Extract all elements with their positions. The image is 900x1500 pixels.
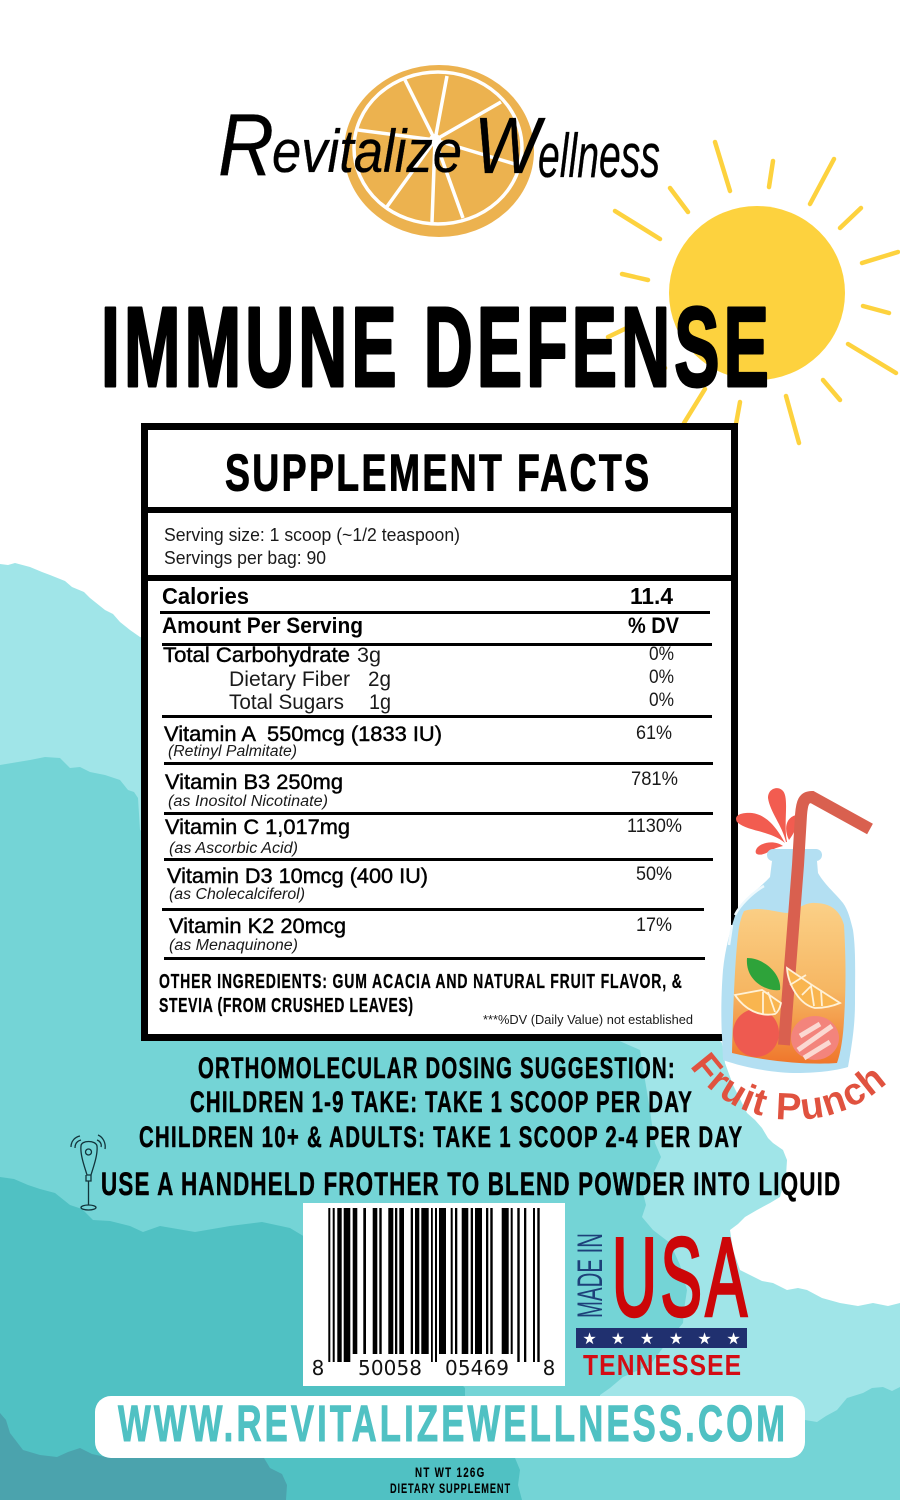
panel: supplement facts [144,426,734,1038]
orange slices [735,968,840,1015]
vitamin K2 row [164,915,705,960]
star band: ★ [640,1329,654,1348]
vitamin A row [164,723,713,765]
carbohydrate rows: Dietary Fiber [229,668,350,691]
other ingredients: OTHER INGREDIENTS: GUM ACACIA AND NATURAL FRUIT FLAVOR, & [159,969,682,993]
heading: supplement facts: SUPPLEMENT FACTS [225,443,649,502]
serving info: Servings per bag: 90 [164,548,326,568]
icon: handheld frother [71,1135,105,1210]
vitamin C row [164,816,713,861]
vitamin A row: 61% [636,723,672,744]
vitamin C row: (as Ascorbic Acid) [169,840,298,857]
website banner: WWW.REVITALIZEWELLNESS.COM [118,1397,785,1453]
carbohydrate rows: Total Carbohydrate [163,644,350,667]
logo wordmark: evitalize [272,118,462,185]
vitamin D3 row: (as Cholecalciferol) [169,886,305,903]
net weight and product type: NT WT 126G [415,1464,484,1480]
other ingredients: STEVIA (FROM CRUSHED LEAVES) [159,993,413,1017]
vitamin K2 row: (as Menaquinone) [169,937,298,954]
vitamin A row: (Retinyl Palmitate) [168,743,297,760]
mint leaf [747,958,780,990]
barcode: 8 [312,1356,324,1380]
vitamin C row: Vitamin C 1,017mg [165,816,350,839]
Tennessee: TENNESSEE [583,1349,741,1381]
logo wordmark [218,95,660,194]
highlight [729,886,764,945]
net weight and product type [390,1464,511,1497]
vitamin B3 row: 781% [631,769,678,790]
carbohydrate rows: 0% [649,690,674,711]
vitamin A row: Vitamin A 550mcg (1833 IU) [164,723,442,746]
carbohydrate rows: Total Sugars [229,691,344,714]
star band: ★ [726,1329,741,1348]
vitamin C row: 1130% [627,816,682,837]
carbohydrate rows: 1g [369,691,391,714]
made in: MADE IN [571,1233,610,1318]
star band: ★ [697,1329,712,1348]
USA: USA [612,1217,747,1340]
carbohydrate rows: 0% [649,667,674,688]
label: fruit punch: Fruit Punch [691,1052,886,1120]
badge: made in USA Tennessee [571,1217,747,1381]
carbohydrate rows [162,644,712,718]
other ingredients [159,969,682,1017]
serving info: Serving size: 1 scoop (~1/2 teaspoon) [164,525,460,545]
dosing instructions: CHILDREN 1-9 TAKE: TAKE 1 SCOOP PER DAY [190,1086,692,1119]
vitamin D3 row [162,864,704,911]
calories row [160,583,710,614]
barcode: 8 [543,1356,555,1380]
daily value footnote: ***%DV (Daily Value) not established [483,1012,693,1027]
straw [784,797,870,1045]
star band [576,1328,747,1348]
logo wordmark: W [474,101,546,190]
icon: sun [608,142,898,443]
amount per serving header: Amount Per Serving [162,613,363,638]
strawberries [733,1009,839,1060]
star band: ★ [669,1329,683,1348]
dosing instructions: ORTHOMOLECULAR DOSING SUGGESTION: [198,1052,675,1085]
illustration: fruit punch bottle [721,788,870,1073]
amount per serving header [162,613,712,646]
barcode: 05469 [445,1356,509,1380]
calories row: 11.4 [630,583,673,609]
splash [736,788,797,855]
bottle glass [721,861,855,1073]
logo wordmark: R [218,95,274,194]
frother tip: USE A HANDHELD FROTHER TO BLEND POWDER INTO LIQUID [101,1166,840,1202]
amount per serving header: % DV [628,613,679,638]
vitamin D3 row: 50% [636,864,672,885]
carbohydrate rows: 2g [368,668,391,691]
logo wordmark: ellness [538,122,660,191]
title: IMMUNE DEFENSE [101,284,769,410]
serving info [164,525,460,568]
calories row: Calories [162,583,249,609]
net weight and product type: DIETARY SUPPLEMENT [390,1480,511,1497]
vitamin B3 row: (as Inositol Nicotinate) [168,793,328,810]
vitamin K2 row: Vitamin K2 20mcg [169,915,346,938]
vitamin D3 row: Vitamin D3 10mcg (400 IU) [167,865,428,888]
barcode [303,1203,565,1386]
carbohydrate rows: 3g [357,644,381,667]
bottle lip [767,849,822,861]
dosing instructions: CHILDREN 10+ & ADULTS: TAKE 1 SCOOP 2-4 PER DAY [139,1121,742,1154]
vitamin B3 row [164,769,713,815]
vitamin K2 row: 17% [636,915,672,936]
barcode: 50058 [358,1356,422,1380]
logo: Revitalize Wellness [218,65,660,237]
icon: orange slice [344,65,534,237]
star band: ★ [611,1329,625,1348]
dosing instructions [139,1052,742,1154]
vitamin B3 row: Vitamin B3 250mg [165,771,343,794]
star band: ★ [582,1329,597,1348]
carbohydrate rows: 0% [649,644,674,665]
